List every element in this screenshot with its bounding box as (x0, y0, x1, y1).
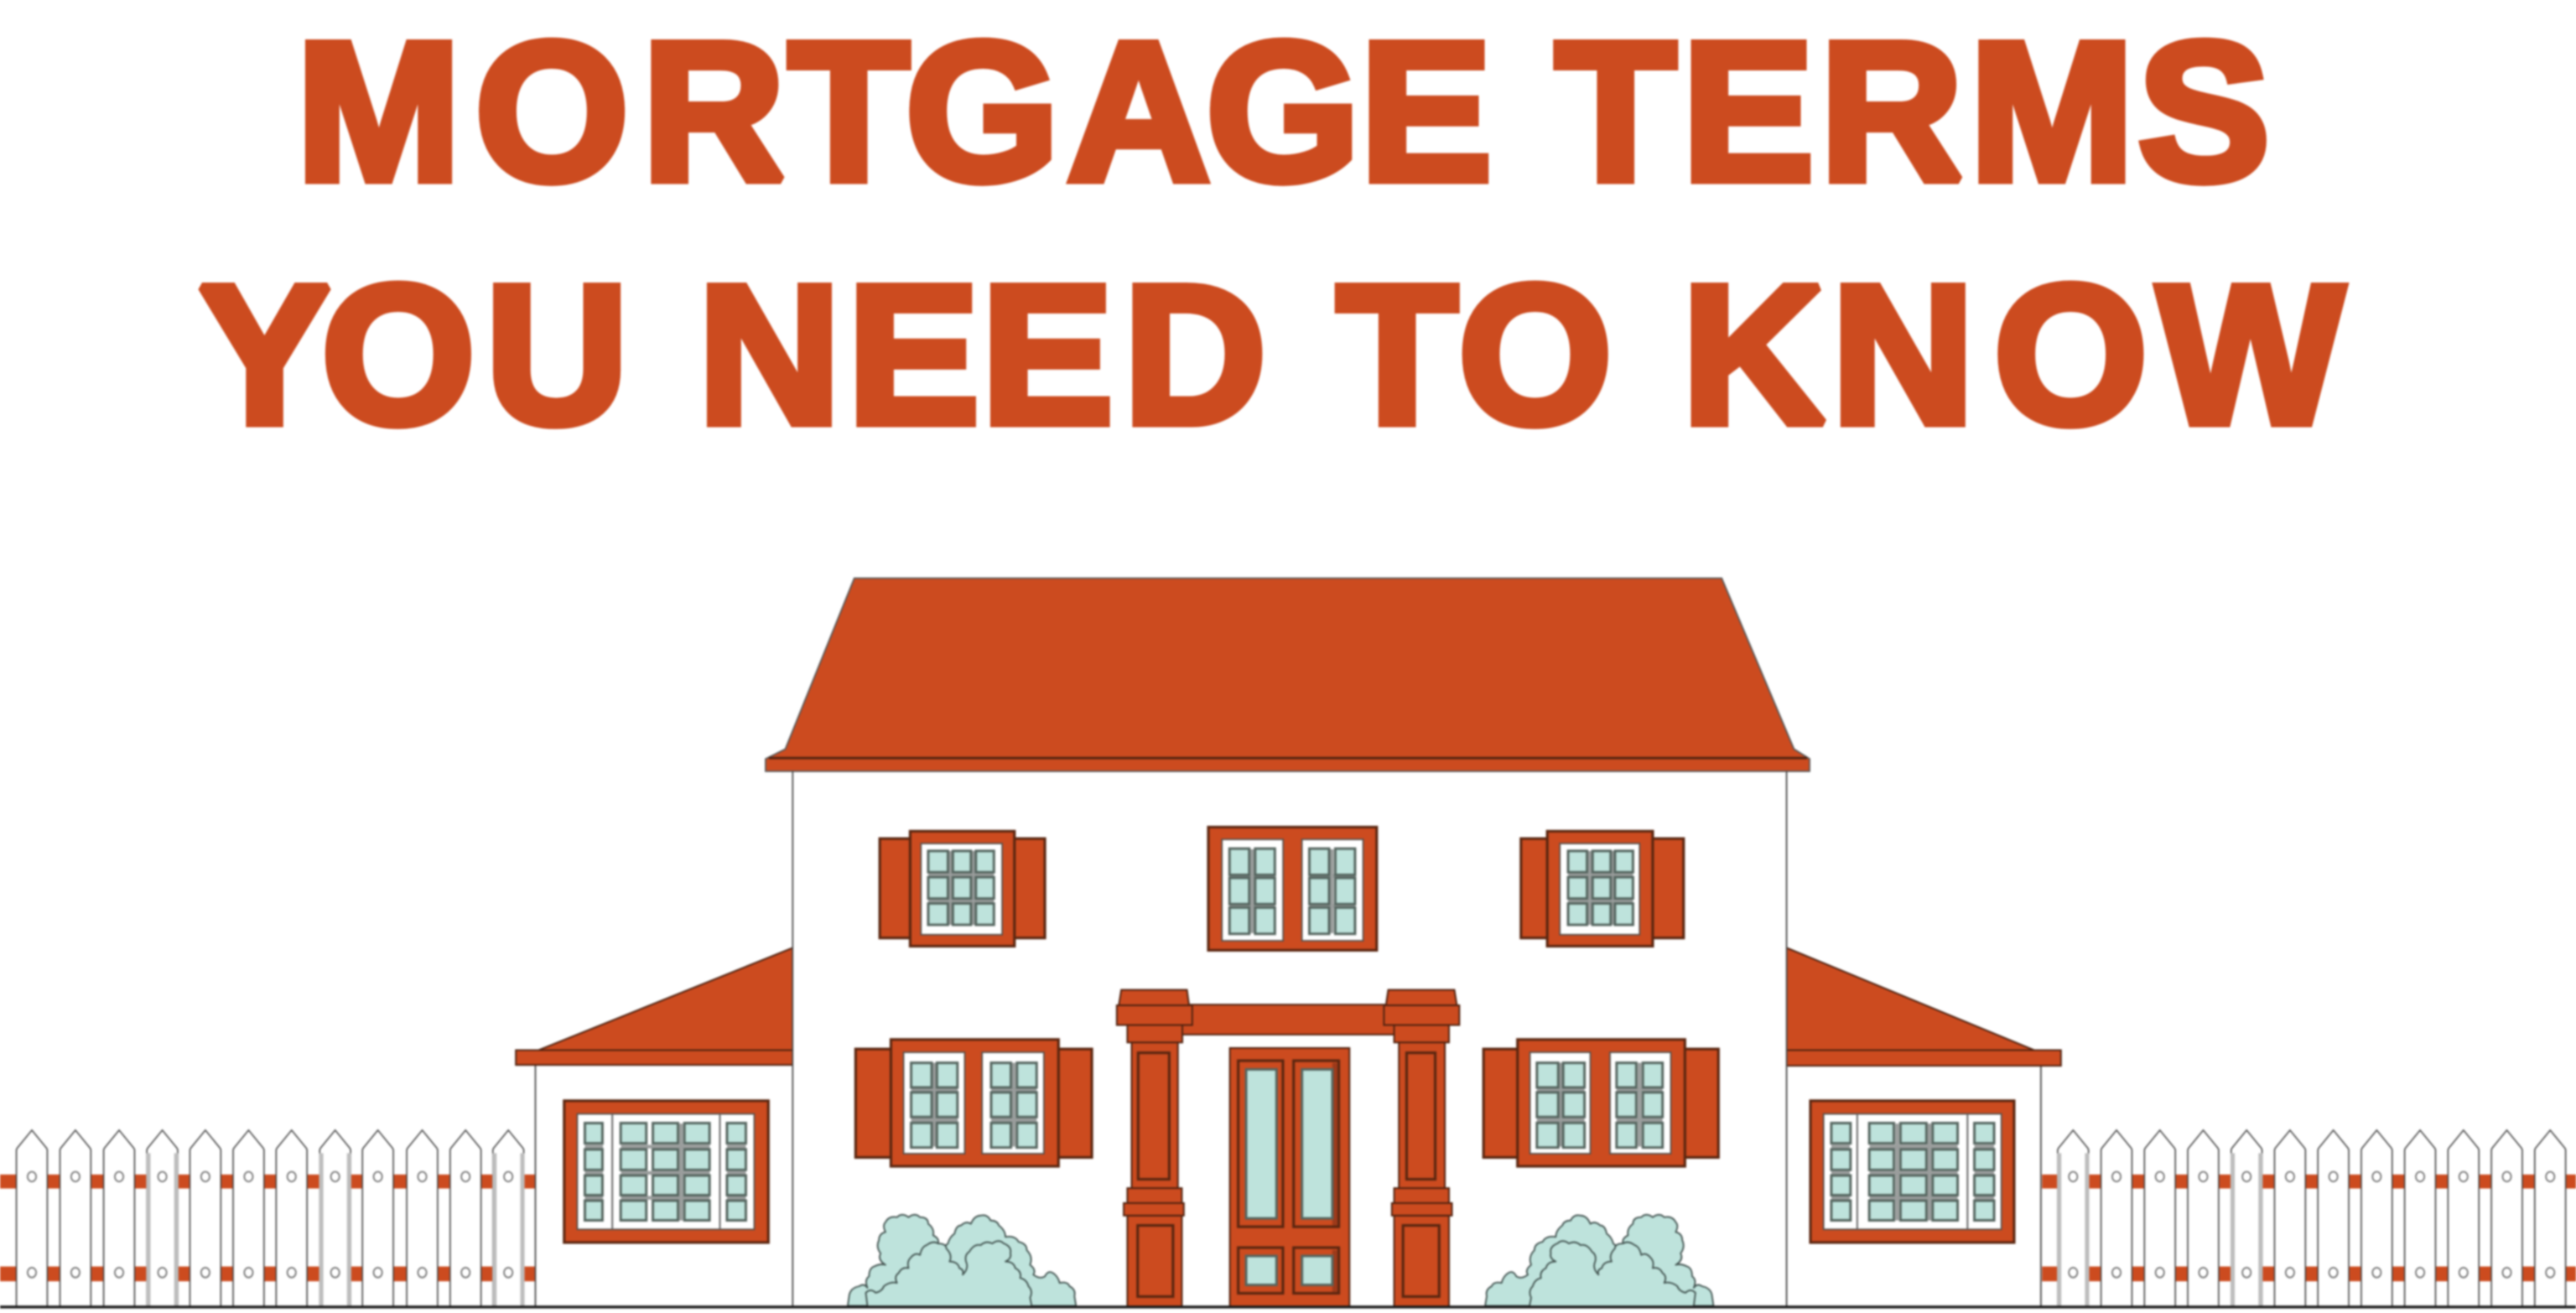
left porch column (1117, 990, 1192, 1307)
title: NEED (699, 244, 1266, 464)
upper centre window (1208, 827, 1377, 950)
title: YOU (199, 244, 628, 464)
title: TO (1337, 244, 1612, 464)
main roof (766, 579, 1810, 771)
lower right window (1483, 1040, 1718, 1166)
front door (1230, 1048, 1349, 1307)
right fence (2042, 1130, 2576, 1307)
title: TERMS (1555, 1, 2270, 221)
title: MORTGAGE (297, 1, 1492, 221)
right wing window (1810, 1101, 2014, 1243)
right shrub (1485, 1215, 1713, 1306)
left wing (516, 947, 793, 1307)
lower left window (855, 1040, 1092, 1166)
left fence (0, 1130, 536, 1307)
main wall (792, 764, 1787, 1307)
upper right window (1521, 831, 1684, 947)
porch lintel (1182, 1004, 1394, 1035)
title: KNOW (1682, 244, 2344, 464)
left shrub (848, 1215, 1076, 1306)
right wing (1787, 947, 2061, 1307)
upper left window (880, 831, 1045, 947)
left wing window (564, 1101, 768, 1243)
ground line (0, 1305, 2576, 1309)
right porch column (1384, 990, 1459, 1307)
house (516, 579, 2061, 1307)
title (199, 1, 2344, 464)
